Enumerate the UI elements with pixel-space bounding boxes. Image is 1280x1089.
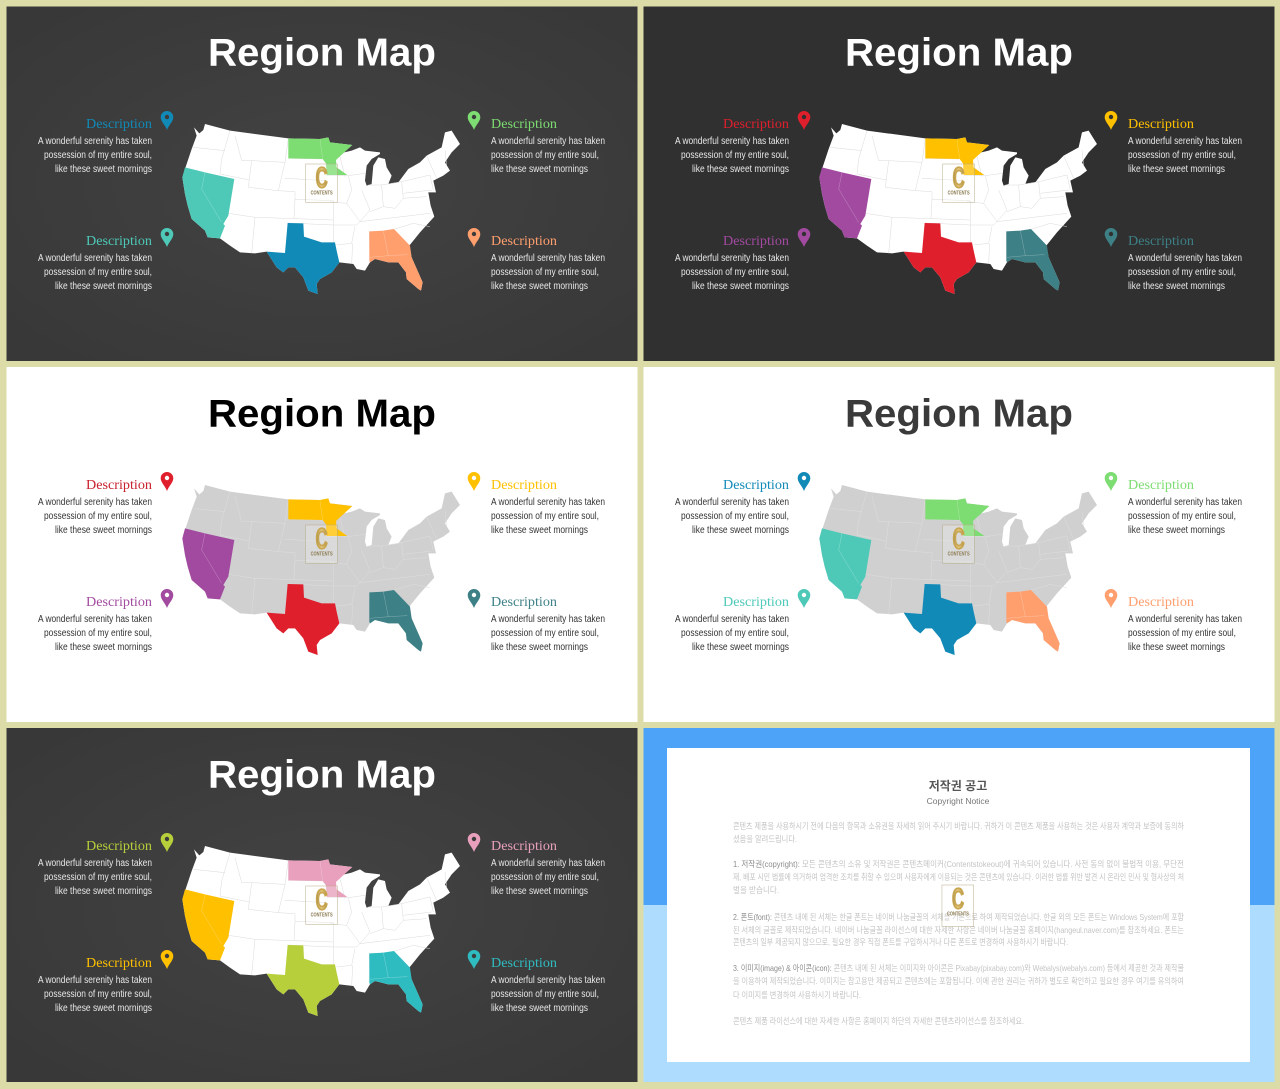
top right description: [1128, 477, 1242, 536]
US map: CONTENTS: [948, 190, 970, 196]
top right description: possession of my entire soul,: [1128, 511, 1236, 522]
icon: pin: [798, 111, 810, 130]
panel: white map red purple yellow dark teal: [6, 367, 638, 722]
bottom right description: A wonderful serenity has taken: [1128, 253, 1242, 264]
top right description: like these sweet mornings: [491, 525, 588, 536]
top right description: [1128, 116, 1242, 175]
bottom left description: [38, 955, 152, 1014]
panel: white map blue teal green orange: [644, 367, 1274, 722]
bottom right description: like these sweet mornings: [491, 281, 588, 292]
icon: pin: [1105, 228, 1117, 247]
bottom right description: A wonderful serenity has taken: [491, 614, 605, 625]
icon: pin: [1105, 472, 1117, 491]
title: Region Map: [208, 392, 436, 436]
icon: pin: [161, 111, 173, 130]
icon: pin: [468, 111, 480, 130]
icon: pin: [468, 472, 480, 491]
icon: pin: [798, 472, 810, 491]
section 2: 된 서체의 글꼴로 제작되었습니다. 네이버 나눔글꼴 라이선스에 대한 자세한 사항은 네이버 나눔글꼴 홈페이지(hangeul.naver.com)를 참조하세요. 폰트는: [733, 925, 1184, 935]
top right description: A wonderful serenity has taken: [491, 497, 605, 508]
bottom right description: possession of my entire soul,: [491, 628, 599, 639]
US map: C: [316, 162, 328, 194]
top right description: like these sweet mornings: [1128, 525, 1225, 536]
bottom left description: like these sweet mornings: [692, 281, 789, 292]
top left description: A wonderful serenity has taken: [675, 497, 789, 508]
bottom right description: like these sweet mornings: [1128, 281, 1225, 292]
section 3: 3. 이미지(image) & 아이콘(icon): 콘텐츠 내에 된 서체는 이미지와 아이콘은 Pixabay(pixabay.com)와 Webalys(webalys.com) 등에서 제공한 것과 제작물: [733, 963, 1184, 973]
icon: pin: [798, 589, 810, 608]
top right description: A wonderful serenity has taken: [491, 136, 605, 147]
US map: CONTENTS: [311, 551, 333, 557]
subheading: Copyright Notice: [927, 796, 990, 806]
icon: pin: [161, 950, 173, 969]
bottom right description: Description: [491, 233, 557, 248]
top left description: A wonderful serenity has taken: [38, 136, 152, 147]
bottom left description: Description: [86, 233, 152, 248]
top right description: [491, 838, 605, 897]
top left description: Description: [723, 477, 789, 492]
top left description: Description: [86, 838, 152, 853]
top left description: possession of my entire soul,: [44, 511, 152, 522]
intro paragraph: 콘텐츠 제품을 사용하시기 전에 다음의 항목과 소유권을 자세히 읽어 주시기 바랍니다. 귀하가 이 콘텐츠 제품을 사용하는 것은 사용자 계약과 보증에 동의하: [733, 821, 1184, 831]
top left description: [38, 116, 152, 175]
section 1: 1. 저작권(copyright): 모든 콘텐츠의 소유 및 저작권은 콘텐츠메이커(Contentstokeout)에 귀속되어 있습니다. 사전 동의 없이 불법적 이용, 무단전: [733, 859, 1184, 869]
logo watermark: [942, 883, 974, 927]
bottom right description: A wonderful serenity has taken: [491, 253, 605, 264]
top right description: [491, 477, 605, 536]
top left description: like these sweet mornings: [55, 164, 152, 175]
bottom left description: A wonderful serenity has taken: [38, 614, 152, 625]
top left description: possession of my entire soul,: [44, 150, 152, 161]
icon: pin: [1105, 111, 1117, 130]
top right description: possession of my entire soul,: [491, 872, 599, 883]
US map: C: [316, 523, 328, 555]
top left description: [38, 477, 152, 536]
top left description: Description: [86, 116, 152, 131]
bottom right description: possession of my entire soul,: [1128, 267, 1236, 278]
bottom left description: possession of my entire soul,: [681, 267, 789, 278]
bottom right description: Description: [1128, 233, 1194, 248]
US map: C: [316, 884, 328, 916]
section 3: 을 이용하여 제작되었습니다. 이미지는 참고용만 제공되고 콘텐츠에는 포함됩니다. 이에 관한 권리는 귀하가 별도로 확인하고 필요한 경우 여기를 유의하여: [733, 976, 1184, 986]
bottom right description: A wonderful serenity has taken: [1128, 614, 1242, 625]
bottom right description: A wonderful serenity has taken: [491, 975, 605, 986]
bottom left description: possession of my entire soul,: [44, 628, 152, 639]
bottom right description: possession of my entire soul,: [491, 267, 599, 278]
intro paragraph: [733, 821, 1184, 844]
bottom right description: [491, 594, 605, 653]
top right description: Description: [1128, 116, 1194, 131]
icon: pin: [161, 589, 173, 608]
top right description: like these sweet mornings: [491, 164, 588, 175]
top right description: Description: [491, 477, 557, 492]
top left description: like these sweet mornings: [55, 525, 152, 536]
top left description: [38, 838, 152, 897]
icon: pin: [468, 228, 480, 247]
US map: CONTENTS: [311, 190, 333, 196]
section 2: 2. 폰트(font): 콘텐츠 내에 된 서체는 한글 폰트는 네이버 나눔글꼴의 서체를 기본으로 하여 제작되었습니다. 한글 외의 모든 폰트는 Windows System에 포함: [733, 912, 1184, 922]
title: Region Map: [208, 32, 436, 74]
top left description: A wonderful serenity has taken: [38, 497, 152, 508]
bottom left description: like these sweet mornings: [692, 642, 789, 653]
bottom right description: like these sweet mornings: [491, 642, 588, 653]
top right description: A wonderful serenity has taken: [491, 858, 605, 869]
section 1: 재, 배포 시민 법률에 의거하여 엄격한 조치를 취할 수 있으며 사용자에게 이용되는 것은 콘텐츠에 있습니다. 이러한 법률 위반 발견 시 온라인 민사 및 형사상의 처: [733, 872, 1184, 882]
top left description: possession of my entire soul,: [681, 150, 789, 161]
panel: dark map red purple yellow dark teal: [644, 6, 1274, 361]
top left description: like these sweet mornings: [692, 525, 789, 536]
US map: CONTENTS: [311, 912, 333, 918]
bottom left description: [675, 594, 789, 653]
closing line: 콘텐츠 제품 라이선스에 대한 자세한 사항은 홈페이지 하단의 자세한 콘텐츠라이선스를 참조하세요.: [733, 1016, 1024, 1026]
title: Region Map: [208, 754, 436, 796]
section 3: 다 이미지를 변경하여 사용하시기 바랍니다.: [733, 990, 861, 1000]
bottom left description: like these sweet mornings: [55, 281, 152, 292]
US map: [819, 124, 1097, 294]
bottom left description: like these sweet mornings: [55, 1003, 152, 1014]
title: Region Map: [845, 392, 1073, 436]
top right description: like these sweet mornings: [491, 886, 588, 897]
icon: pin: [798, 228, 810, 247]
top right description: possession of my entire soul,: [1128, 150, 1236, 161]
section 3: [733, 963, 1184, 1000]
top left description: Description: [723, 116, 789, 131]
bottom left description: [675, 233, 789, 292]
US map: C: [953, 162, 965, 194]
icon: pin: [161, 833, 173, 852]
US map: [182, 485, 460, 655]
bottom left description: A wonderful serenity has taken: [38, 253, 152, 264]
bottom right description: [491, 233, 605, 292]
icon: pin: [1105, 589, 1117, 608]
icon: pin: [161, 472, 173, 491]
bottom left description: A wonderful serenity has taken: [38, 975, 152, 986]
top right description: Description: [491, 838, 557, 853]
top right description: Description: [491, 116, 557, 131]
title: Region Map: [845, 32, 1073, 74]
top left description: [675, 477, 789, 536]
bottom right description: [1128, 233, 1242, 292]
US map: [819, 485, 1097, 655]
top right description: Description: [1128, 477, 1194, 492]
bottom left description: Description: [86, 955, 152, 970]
US map: [182, 124, 460, 294]
bottom left description: Description: [723, 594, 789, 609]
bottom right description: like these sweet mornings: [491, 1003, 588, 1014]
section 1: [733, 859, 1184, 895]
US map: C: [953, 523, 965, 555]
panel: dark map blue teal green orange: [6, 6, 638, 361]
logo watermark: C: [952, 883, 964, 915]
top right description: A wonderful serenity has taken: [1128, 136, 1242, 147]
top left description: A wonderful serenity has taken: [675, 136, 789, 147]
icon: pin: [468, 833, 480, 852]
bottom right description: possession of my entire soul,: [1128, 628, 1236, 639]
bottom right description: Description: [491, 594, 557, 609]
bottom right description: like these sweet mornings: [1128, 642, 1225, 653]
bottom left description: possession of my entire soul,: [44, 989, 152, 1000]
top left description: Description: [86, 477, 152, 492]
heading: 저작권 공고: [929, 778, 987, 793]
section 1: 벌을 받습니다.: [733, 885, 779, 895]
bottom left description: A wonderful serenity has taken: [675, 253, 789, 264]
section 2: [733, 912, 1184, 947]
intro paragraph: 셨음을 알려드립니다.: [733, 834, 797, 844]
top right description: A wonderful serenity has taken: [1128, 497, 1242, 508]
US map: CONTENTS: [948, 551, 970, 557]
top right description: possession of my entire soul,: [491, 150, 599, 161]
logo watermark: CONTENTS: [947, 911, 969, 917]
top right description: [491, 116, 605, 175]
bottom left description: A wonderful serenity has taken: [675, 614, 789, 625]
top left description: [675, 116, 789, 175]
top left description: possession of my entire soul,: [681, 511, 789, 522]
icon: pin: [161, 228, 173, 247]
bottom left description: like these sweet mornings: [55, 642, 152, 653]
top right description: like these sweet mornings: [1128, 164, 1225, 175]
bottom left description: Description: [86, 594, 152, 609]
bottom left description: Description: [723, 233, 789, 248]
top left description: possession of my entire soul,: [44, 872, 152, 883]
section 2: 콘텐츠의 일부 제공되지 않으므로, 필요한 경우 직접 폰트를 구입하시거나 다른 폰트로 변경하여 사용하시기 바랍니다.: [733, 937, 1068, 947]
top left description: like these sweet mornings: [55, 886, 152, 897]
bottom left description: possession of my entire soul,: [44, 267, 152, 278]
top right description: possession of my entire soul,: [491, 511, 599, 522]
US map: [182, 846, 460, 1016]
panel: dark map lime yellow pink teal: [6, 728, 638, 1082]
bottom right description: possession of my entire soul,: [491, 989, 599, 1000]
bottom left description: possession of my entire soul,: [681, 628, 789, 639]
bottom right description: [1128, 594, 1242, 653]
bottom right description: Description: [1128, 594, 1194, 609]
bottom left description: [38, 233, 152, 292]
top left description: like these sweet mornings: [692, 164, 789, 175]
top left description: A wonderful serenity has taken: [38, 858, 152, 869]
bottom left description: [38, 594, 152, 653]
bottom right description: [491, 955, 605, 1014]
panel: copyright notice: [644, 728, 1274, 1082]
icon: pin: [468, 589, 480, 608]
bottom right description: Description: [491, 955, 557, 970]
icon: pin: [468, 950, 480, 969]
